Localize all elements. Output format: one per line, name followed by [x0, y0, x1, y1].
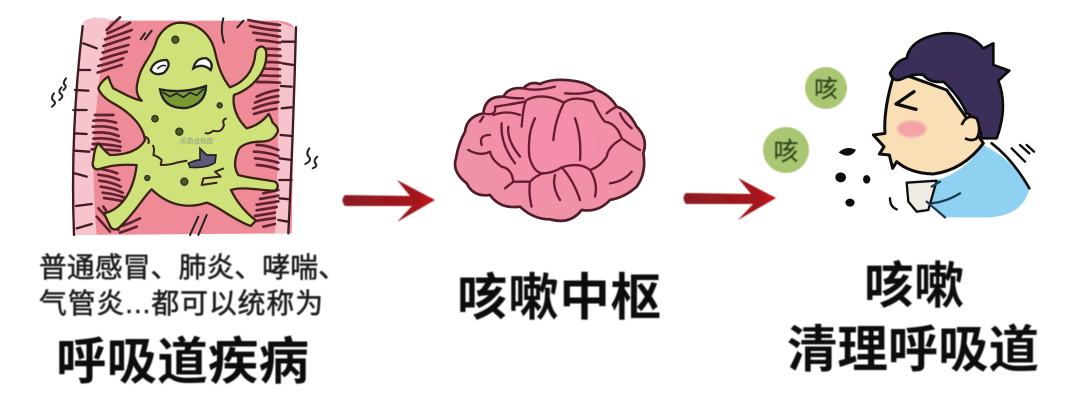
cilia left	[92, 17, 140, 233]
motion lines	[890, 145, 1034, 209]
germ mouth	[160, 86, 206, 108]
heading: cough clears airway: 咳嗽	[864, 258, 964, 314]
badge: cough upper: 咳	[814, 76, 838, 103]
germ tattered inner lines	[145, 118, 227, 185]
shirt	[927, 145, 1029, 217]
arrow 1	[342, 180, 435, 222]
heading: cough clears airway	[787, 258, 1039, 378]
blush	[897, 121, 926, 137]
droplets	[835, 148, 870, 207]
germ tiny label: 杀菌成熟菌	[180, 136, 214, 145]
germ spots	[145, 36, 222, 185]
illustration: coughing boy	[835, 33, 1034, 217]
hair	[890, 33, 1009, 138]
text block: disease list: 普通感冒、肺炎、哮喘、	[39, 252, 346, 283]
ear	[962, 117, 979, 140]
airway wall lines	[73, 26, 296, 235]
airway wall right	[275, 22, 295, 233]
badge: cough lower	[763, 127, 809, 173]
cilia right	[248, 20, 281, 227]
heading: cough center: 咳嗽中枢	[457, 269, 661, 326]
airway lumen background	[75, 21, 295, 235]
text block: disease list	[39, 252, 346, 319]
face	[873, 77, 983, 174]
germ eyes	[151, 58, 212, 74]
germ body	[93, 23, 278, 229]
illustration: germ in airway	[52, 17, 317, 235]
arrow 2	[684, 178, 776, 220]
hand and sleeve	[907, 181, 937, 212]
heading: cough clears airway: 清理呼吸道	[787, 321, 1039, 378]
germ grey patch	[188, 148, 216, 167]
eye	[896, 92, 916, 109]
text block: disease list: 气管炎...都可以统称为	[39, 288, 323, 319]
brain folds	[468, 87, 640, 207]
airway wall left	[73, 18, 110, 235]
badge: cough upper	[805, 67, 847, 109]
squiggle marks	[52, 18, 317, 235]
brain outline	[455, 80, 645, 221]
illustration: brain	[455, 80, 645, 221]
heading: respiratory disease: 呼吸道疾病	[56, 333, 309, 390]
badge: cough lower: 咳	[773, 138, 799, 166]
